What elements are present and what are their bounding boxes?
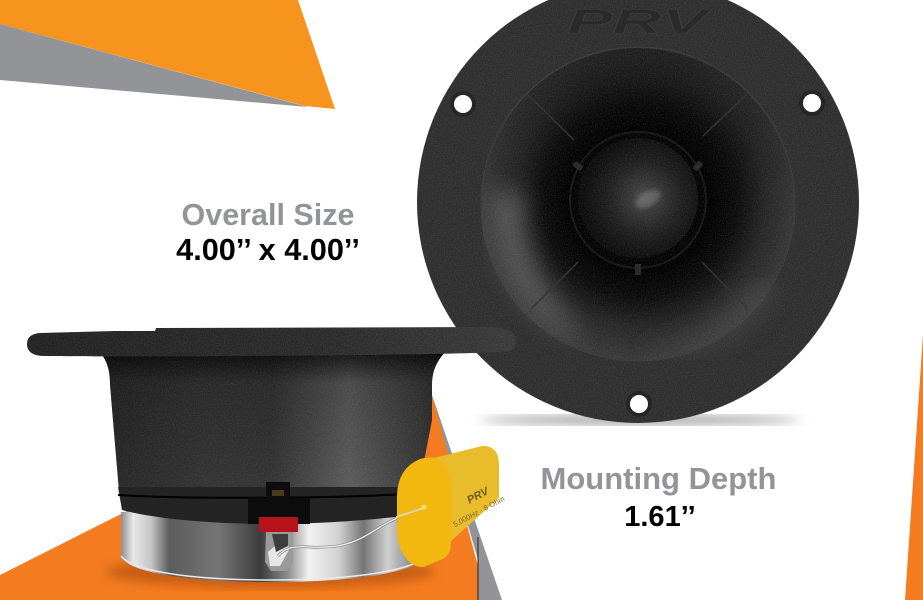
- red terminal: [259, 517, 298, 532]
- cast shadow: [480, 415, 800, 425]
- thin dark line: [478, 537, 479, 600]
- top left gray wedge: [0, 24, 308, 107]
- flange disc: [417, 0, 859, 423]
- dome clips: [572, 160, 704, 275]
- horn: [481, 47, 795, 361]
- overall size label: 4.00’’ x 4.00’’: [176, 232, 360, 267]
- bottom gray wedge: [432, 395, 502, 600]
- tweeter side view: [27, 327, 516, 588]
- mounting depth label: 1.61’’: [624, 501, 696, 533]
- chrome magnet ring: [121, 512, 424, 582]
- flange: [27, 327, 516, 356]
- capacitor body: [430, 446, 499, 541]
- top left orange wedge: [0, 0, 335, 109]
- capacitor rating: 5,000Hz - 8 Ohm: [451, 494, 506, 529]
- wire end on capacitor: [396, 508, 424, 517]
- bottom orange shape: [0, 395, 478, 600]
- contact shadow: [105, 556, 435, 588]
- terminal block: [248, 498, 310, 524]
- right edge orange strip: [905, 335, 923, 600]
- capacitor logo: PRV: [465, 485, 492, 507]
- grain texture: [417, 0, 859, 423]
- chrome bottom edge: [121, 556, 424, 580]
- capacitor face: [397, 458, 452, 567]
- horn top shade: [482, 48, 794, 360]
- embossed logo: PRV: [567, 3, 714, 41]
- terminal notch: [266, 482, 290, 498]
- tweeter front view: [417, 0, 859, 425]
- horn highlight: [492, 190, 585, 340]
- wire: [278, 508, 424, 556]
- horn ribs: [527, 94, 747, 309]
- body: [100, 352, 445, 492]
- mounting depth label: Mounting Depth: [541, 461, 776, 496]
- dome surround: [570, 132, 706, 268]
- silver tab: [265, 532, 293, 571]
- dome: [578, 138, 698, 258]
- capacitor lead tip: [422, 504, 426, 510]
- mounting holes: [450, 90, 825, 417]
- clamp ring: [118, 487, 420, 524]
- overall size label: Overall Size: [182, 198, 354, 232]
- mounting depth label: [541, 461, 776, 533]
- overall size label: [176, 198, 360, 267]
